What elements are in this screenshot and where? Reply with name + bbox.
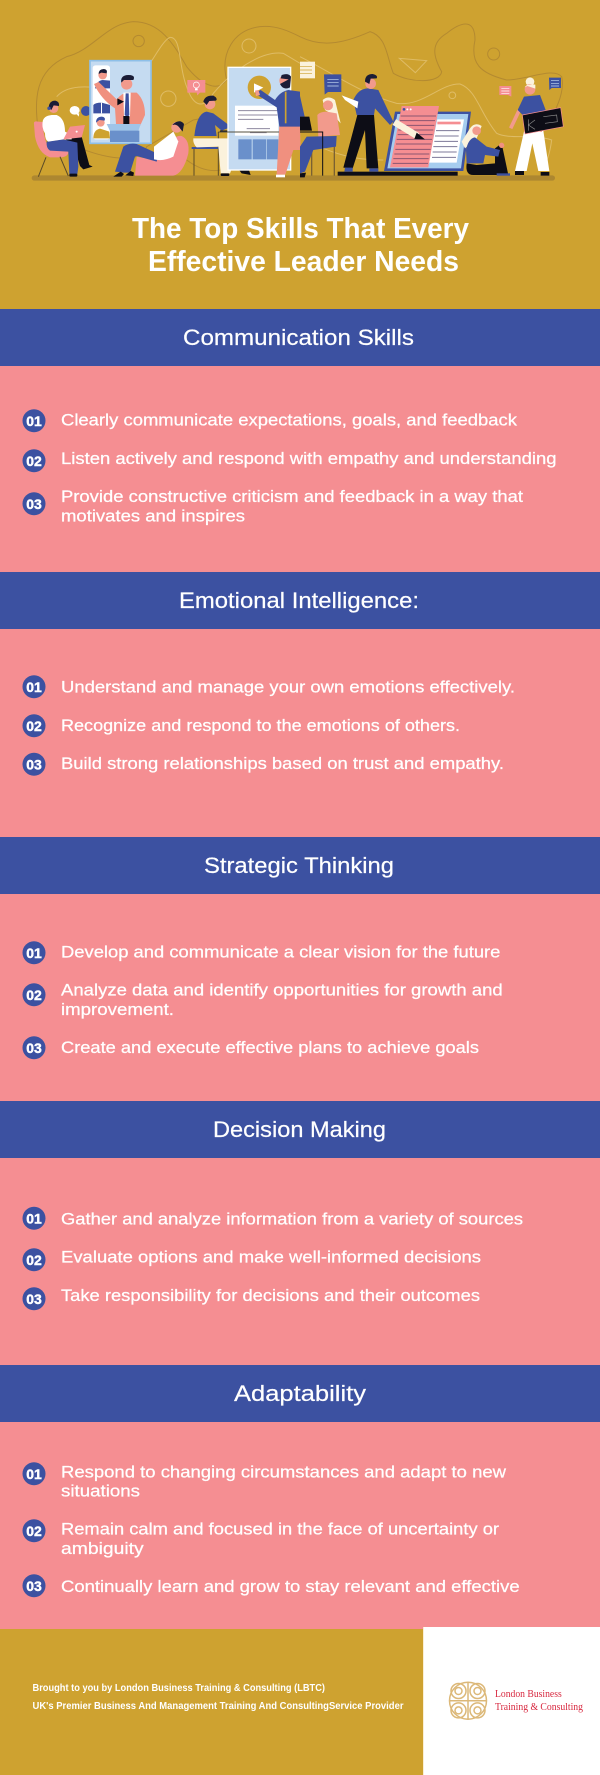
title: The Top Skills That Every [132,213,469,245]
list panel: Create and execute effective plans to achieve goals [61,1038,479,1057]
heading bar [0,1101,600,1158]
title [132,213,469,278]
list panel [0,1158,600,1365]
list panel: 03 [26,756,42,772]
heading bar: Strategic Thinking [204,853,394,878]
list panel: improvement. [61,1000,174,1019]
panel: strategic thinking [0,837,600,1101]
illustration left half [32,22,555,181]
video panel with play button and document [218,67,300,170]
list panel: 01 [26,679,42,695]
icon: celtic knot logo [450,1682,486,1719]
heading bar: Adaptability [234,1381,366,1406]
heading bar: Decision Making [213,1117,386,1142]
person: man on laptop at desk [192,96,251,176]
list panel: motivates and inspires [61,506,245,525]
list panel: Develop and communicate a clear vision for the future [61,942,500,961]
icon: small blue speech bubble [549,78,561,90]
person: woman holding blackboard [511,77,563,176]
list panel [0,894,600,1101]
video call panel with presenter [90,61,151,143]
list panel: Continually learn and grow to stay relevant and effective [61,1577,520,1596]
illustration right half [300,24,563,177]
panel: adaptability [0,1365,600,1629]
list panel: 02 [26,718,42,734]
ground shadow [32,175,555,181]
heading bar [0,837,600,894]
heading bar [0,309,600,366]
list panel: ambiguity [61,1539,144,1558]
icon: light bulb speech bubble [187,80,205,95]
title: Effective Leader Needs [148,246,459,278]
panel: decision making [0,1101,600,1365]
heading bar: Communication Skills [183,325,414,350]
list panel [0,1422,600,1629]
list panel: 03 [26,1040,42,1056]
list panel: Clearly communicate expectations, goals, and feedback [61,410,518,430]
list panel: 01 [26,1466,42,1482]
footer credit text: UK's Premier Business And Management Training And ConsultingService Provider [32,1700,404,1712]
person: woman sitting on floor [462,124,510,176]
list panel: Listen actively and respond with empathy and understanding [61,449,556,468]
list panel: Remain calm and focused in the face of uncertainty or [61,1519,499,1538]
list panel: 02 [26,1252,42,1268]
panel: emotional intelligence [0,572,600,837]
list panel: Take responsibility for decisions and their outcomes [61,1286,480,1305]
icon: blue speech bubble [324,74,341,95]
list panel: Understand and manage your own emotions effectively. [61,678,515,697]
logo wordmark: Training & Consulting [495,1701,583,1713]
logo wordmark [495,1688,583,1713]
footer credit text [32,1682,404,1712]
icon: pink speech bubble [499,86,511,97]
list panel: 02 [26,987,42,1003]
list panel: Respond to changing circumstances and adapt to new [61,1462,507,1481]
list panel: 01 [26,1210,42,1226]
list panel: Recognize and respond to the emotions of others. [61,716,460,735]
list panel: situations [61,1481,140,1500]
list panel: 03 [26,496,42,512]
heading bar [0,572,600,629]
list panel [0,366,600,572]
logo panel [423,1627,600,1775]
person: woman at desk [300,96,341,177]
list panel: 01 [26,945,42,961]
footer credit text: Brought to you by London Business Training & Consulting (LBTC) [32,1682,325,1694]
panel: communication skills [0,309,600,572]
large laptop with documents [338,106,471,176]
person: bearded man pointing [255,74,301,177]
list panel [0,629,600,837]
heading bar: Emotional Intelligence: [179,588,419,613]
list panel: Gather and analyze information from a variety of sources [61,1209,523,1228]
person: man with headset in chair [34,101,93,177]
header illustration: team at work [32,22,563,181]
list panel: 02 [26,1523,42,1539]
list panel: Analyze data and identify opportunities for growth and [61,981,503,1000]
logo wordmark: London Business [495,1688,562,1700]
person: man holding giant pen [342,74,425,172]
list panel: 01 [26,413,42,429]
list panel: 03 [26,1291,42,1307]
list panel: Evaluate options and make well-informed decisions [61,1248,481,1267]
list panel: 02 [26,453,42,469]
list panel: Provide constructive criticism and feedback in a way that [61,487,523,506]
person: man on bean bag [113,121,189,177]
list panel: 03 [26,1578,42,1594]
icon: white speech bubble [300,62,315,78]
footer panel [0,1627,600,1775]
list panel: Build strong relationships based on trust and empathy. [61,754,504,773]
heading bar [0,1365,600,1422]
